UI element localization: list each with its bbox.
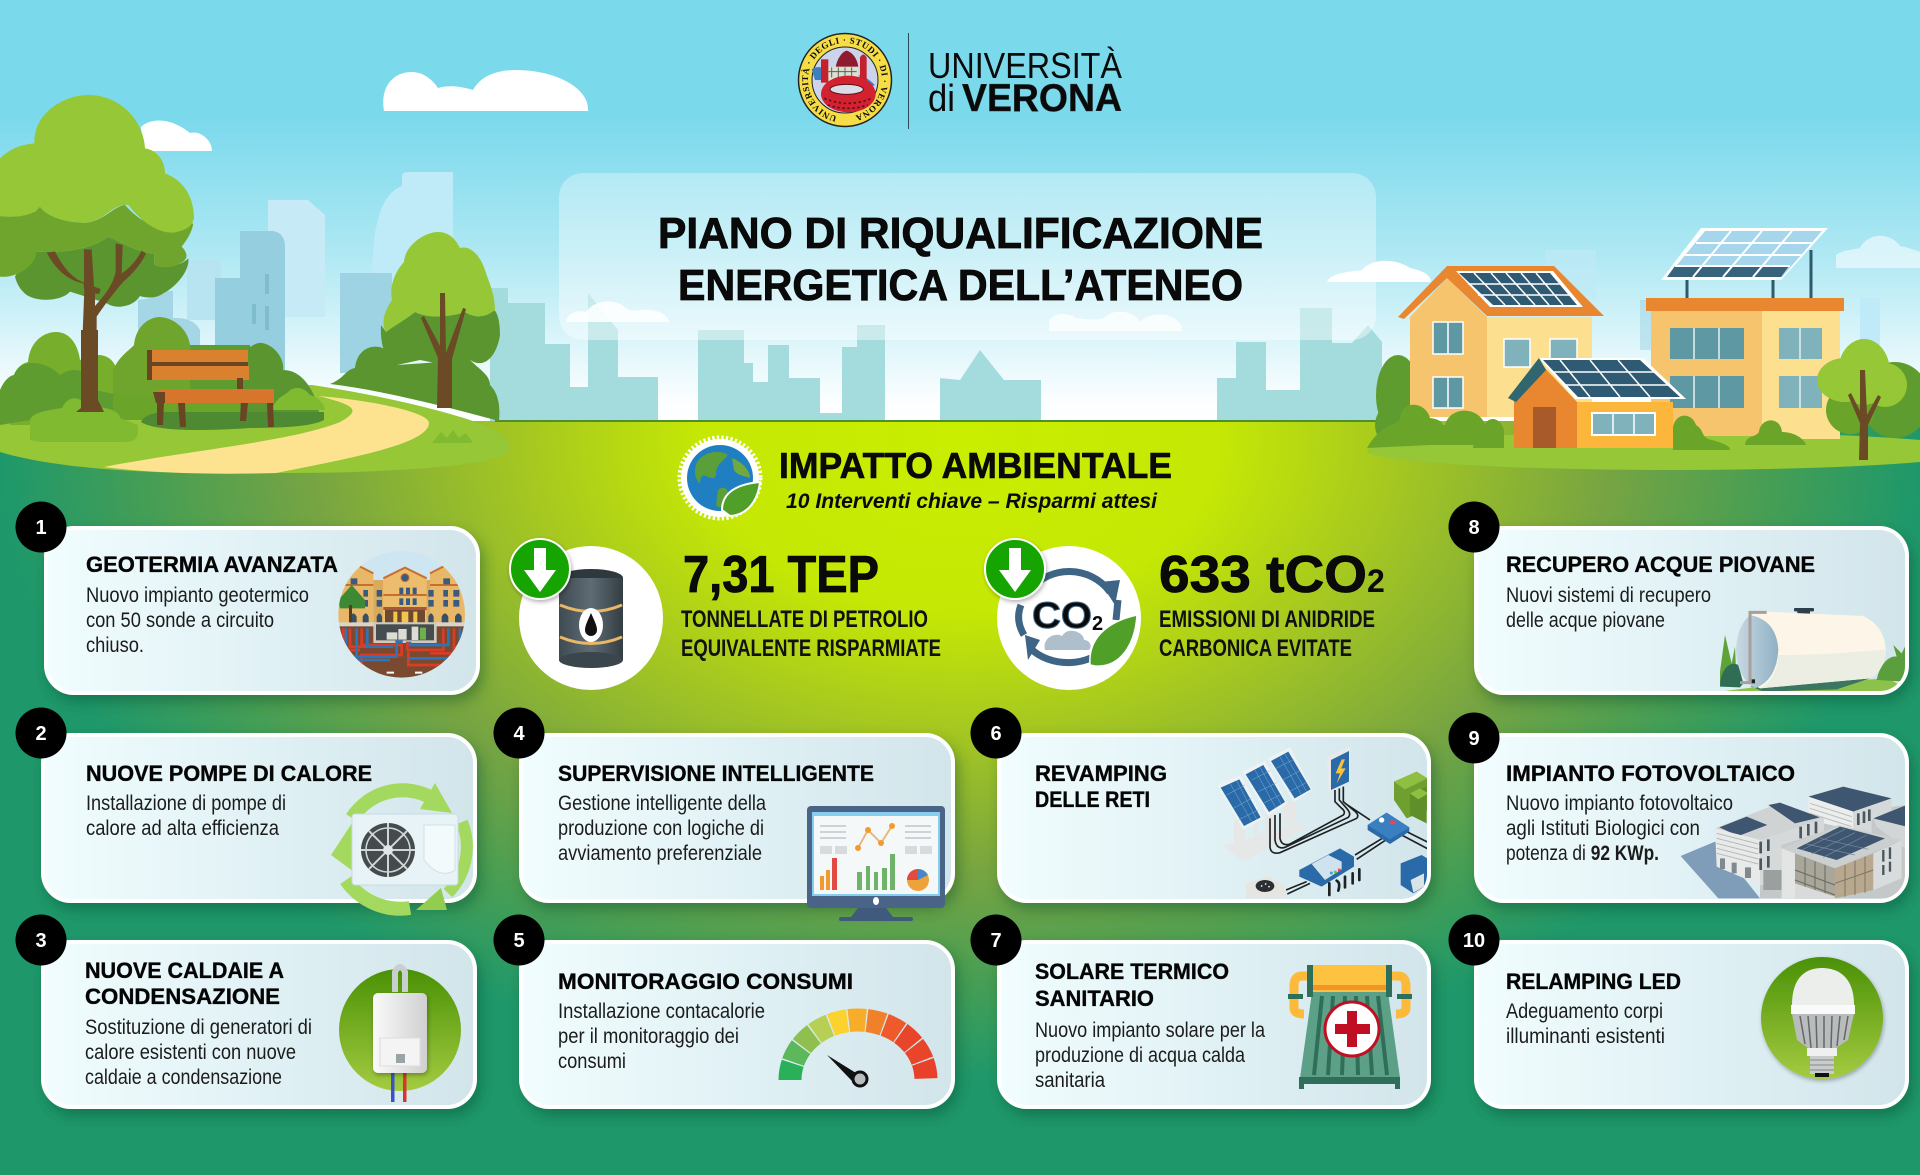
card 7: solare termico: Nuovo impianto solare per la	[1035, 1019, 1265, 1042]
left park scene	[0, 95, 510, 474]
impact header: 10 Interventi chiave – Risparmi attesi	[786, 490, 1158, 513]
title: ENERGETICA DELL’ATENEO	[678, 261, 1243, 310]
university logo	[798, 32, 1122, 129]
card 9: fotovoltaico: potenza di 92 KWp.	[1506, 842, 1659, 865]
badge 8	[1448, 502, 1500, 552]
impact header	[681, 439, 1172, 517]
badge 9: 9	[1468, 728, 1480, 750]
stat: oil saved: EQUIVALENTE RISPARMIATE	[681, 635, 941, 662]
globe emblem	[681, 439, 760, 517]
illustration: gauge	[790, 1020, 926, 1086]
card 3: caldaie: Sostituzione di generatori di	[85, 1016, 312, 1039]
stat: oil saved	[510, 539, 941, 690]
illustration: geothermal building	[337, 550, 467, 680]
apartment building	[1646, 228, 1844, 439]
card 2: pompe di calore: Installazione di pompe di	[86, 792, 286, 815]
building right	[1874, 819, 1905, 848]
icon: CO2 cycle: CO	[1032, 595, 1092, 636]
university logo: UNIVERSITÀ	[928, 45, 1122, 86]
city skyline	[138, 172, 1880, 421]
title	[658, 209, 1263, 310]
meter	[1246, 876, 1286, 898]
badge 3	[16, 914, 66, 966]
card 4: supervisione	[521, 735, 953, 921]
card 3: caldaie: CONDENSAZIONE	[85, 984, 280, 1009]
badge 4: 4	[513, 723, 525, 745]
illustration: solar campus	[1681, 787, 1907, 901]
card 9: fotovoltaico: agli Istituti Biologici con	[1506, 817, 1700, 840]
card 7: solare termico: SOLARE TERMICO	[1035, 959, 1229, 984]
card 8: acque piovane: RECUPERO ACQUE PIOVANE	[1506, 552, 1815, 577]
bushes behind	[1375, 355, 1420, 447]
badge 2: 2	[35, 723, 47, 745]
small orange house	[1508, 358, 1686, 448]
illustration: water tank	[1720, 608, 1907, 692]
path	[104, 396, 429, 474]
card 7: solare termico: sanitaria	[1035, 1069, 1105, 1092]
card 5: monitoraggio: per il monitoraggio dei	[558, 1025, 739, 1048]
university logo: di	[928, 78, 955, 120]
card 3: caldaie: calore esistenti con nuove	[85, 1041, 296, 1064]
card 9: fotovoltaico: Nuovo impianto fotovoltaico	[1506, 792, 1733, 815]
card 10: relamping: Adeguamento corpi	[1506, 1000, 1663, 1023]
controller	[1299, 848, 1354, 887]
badge 10	[1448, 914, 1500, 966]
card 2: pompe di calore: calore ad alta efficienza	[86, 817, 279, 840]
solar panels	[1217, 747, 1312, 862]
card 5: monitoraggio: Installazione contacalorie	[558, 1000, 765, 1023]
card 1: geotermia	[46, 528, 478, 693]
badge 4	[494, 708, 544, 758]
card 6: revamping: REVAMPING	[1035, 761, 1167, 786]
campus base	[1760, 797, 1907, 898]
cables	[1270, 787, 1430, 894]
small tree	[330, 232, 500, 421]
card 3: caldaie: NUOVE CALDAIE A	[85, 958, 284, 983]
impact header: IMPATTO AMBIENTALE	[779, 445, 1172, 486]
card 1: geotermia: GEOTERMIA AVANZATA	[86, 552, 338, 577]
illustration: monitor dashboard	[807, 806, 945, 921]
small bushes	[1367, 405, 1806, 450]
stat: CO2 avoided: CARBONICA EVITATE	[1159, 635, 1352, 662]
card 4: supervisione: avviamento preferenziale	[558, 842, 762, 865]
badge 9	[1448, 712, 1500, 764]
card 1: geotermia: chiuso.	[86, 634, 144, 657]
card 1: geotermia: Nuovo impianto geotermico	[86, 584, 309, 607]
card 8: acque piovane	[1476, 528, 1907, 693]
badge 5	[494, 914, 544, 966]
card 10: relamping	[1476, 942, 1907, 1107]
card 5: monitoraggio: consumi	[558, 1050, 626, 1073]
badge 5: 5	[513, 930, 525, 952]
ground shadow	[1681, 842, 1760, 898]
card 6: revamping	[999, 735, 1430, 901]
right houses scene	[1367, 228, 1920, 470]
building left	[1715, 803, 1824, 890]
illustration: electric network	[1217, 747, 1430, 898]
stat: oil saved: TONNELLATE DI PETROLIO	[681, 606, 928, 633]
lower right unit	[1401, 855, 1430, 893]
bench	[147, 350, 274, 427]
card 10: relamping: RELAMPING LED	[1506, 969, 1681, 994]
university seal: UNIVERSITÀ · DEGLI · STUDI · DI · VERONA	[801, 38, 888, 122]
junction box	[1368, 813, 1409, 844]
badge 1	[16, 502, 66, 552]
stat: CO2 avoided: 2	[1367, 563, 1385, 599]
card 4: supervisione: Gestione intelligente della	[558, 792, 766, 815]
card 3: caldaie: caldaie a condensazione	[85, 1066, 282, 1089]
yellow house	[1398, 266, 1604, 417]
building front	[1782, 825, 1902, 901]
illustration: heat pump	[331, 783, 467, 910]
badge 10: 10	[1463, 930, 1485, 952]
card 3: caldaie	[43, 942, 475, 1107]
hill	[1367, 432, 1920, 470]
card 9: fotovoltaico: IMPIANTO FOTOVOLTAICO	[1506, 761, 1795, 786]
right tree	[1817, 339, 1920, 460]
title panel	[559, 173, 1376, 340]
illustration: LED bulb	[1761, 957, 1883, 1079]
stat: CO2 avoided: EMISSIONI DI ANIDRIDE	[1159, 606, 1375, 633]
card 5: monitoraggio	[521, 942, 953, 1107]
badge 6: 6	[990, 723, 1002, 745]
stat: oil saved: 7,31 TEP	[683, 546, 879, 604]
battery stacks	[1394, 772, 1427, 818]
icon: CO2 cycle	[1019, 571, 1137, 666]
card 1: geotermia: con 50 sonde a circuito	[86, 609, 274, 632]
card 2: pompe di calore: NUOVE POMPE DI CALORE	[86, 761, 372, 786]
university logo: VERONA	[962, 77, 1122, 120]
illustration: solar water heater	[1288, 965, 1412, 1089]
clouds	[141, 70, 1920, 331]
building back	[1808, 787, 1892, 833]
stat: CO2 avoided: 633 tCO	[1159, 546, 1367, 604]
icon: oil barrel	[559, 569, 623, 668]
icon: CO2 cycle: 2	[1092, 613, 1103, 635]
badge 7	[970, 914, 1022, 966]
icon: down arrow	[510, 539, 570, 599]
inverter	[1327, 747, 1350, 793]
badge 2	[16, 708, 66, 758]
badge 1: 1	[35, 517, 47, 539]
card 9: fotovoltaico	[1476, 735, 1907, 901]
badge 7: 7	[990, 930, 1002, 952]
stat: CO2 avoided	[985, 539, 1385, 690]
badge 8: 8	[1468, 517, 1480, 539]
green ground	[0, 421, 1920, 1175]
card 7: solare termico: produzione di acqua calda	[1035, 1044, 1245, 1067]
title: PIANO DI RIQUALIFICAZIONE	[658, 209, 1263, 258]
card 5: monitoraggio: MONITORAGGIO CONSUMI	[558, 969, 853, 994]
badge 6	[970, 708, 1022, 758]
card 7: solare termico	[999, 942, 1429, 1107]
icon: down arrow	[985, 539, 1045, 599]
sky background	[0, 0, 1920, 422]
bushes	[0, 317, 473, 443]
hill	[0, 385, 510, 473]
card 7: solare termico: SANITARIO	[1035, 986, 1154, 1011]
card 10: relamping: illuminanti esistenti	[1506, 1025, 1665, 1048]
illustration: boiler	[339, 967, 461, 1102]
card 2: pompe di calore	[43, 735, 475, 910]
large tree	[0, 95, 194, 412]
card 8: acque piovane: Nuovi sistemi di recupero	[1506, 584, 1711, 607]
card 8: acque piovane: delle acque piovane	[1506, 609, 1665, 632]
card 4: supervisione: SUPERVISIONE INTELLIGENTE	[558, 761, 874, 786]
card 6: revamping: DELLE RETI	[1035, 787, 1150, 812]
badge 3: 3	[35, 930, 47, 952]
card 4: supervisione: produzione con logiche di	[558, 817, 764, 840]
